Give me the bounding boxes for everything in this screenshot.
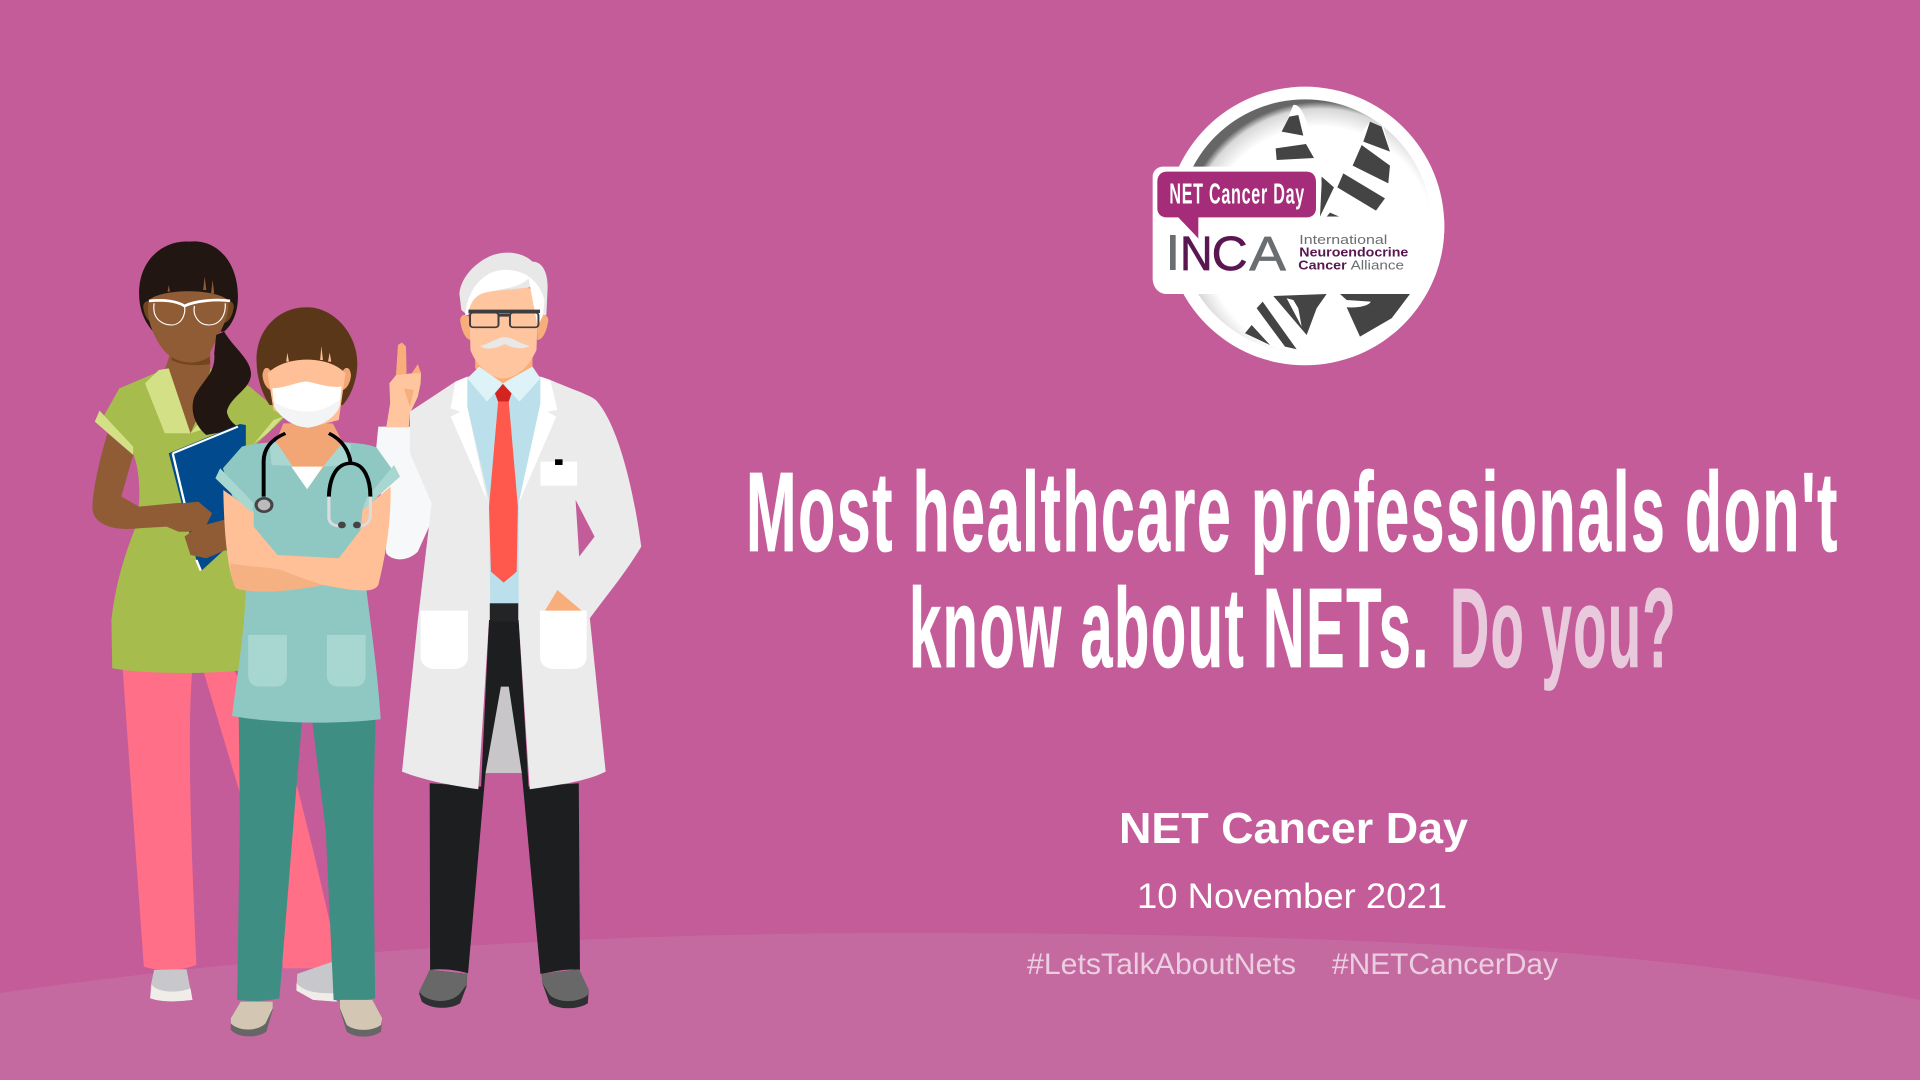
collar — [467, 367, 540, 402]
trousers — [122, 667, 333, 970]
INCA wordmark: N — [1180, 228, 1213, 281]
tunic — [223, 442, 391, 723]
shoes — [419, 969, 589, 1001]
figure: nurse — [215, 307, 400, 1037]
sleeve cuffs — [215, 465, 400, 513]
headline — [746, 449, 1839, 691]
alliance name: International — [1299, 233, 1387, 247]
logo white band — [1153, 167, 1444, 294]
face — [268, 360, 345, 428]
badge — [540, 462, 577, 486]
INCA wordmark: A — [1249, 228, 1286, 281]
moustache — [480, 337, 530, 349]
ears — [460, 315, 548, 340]
book — [169, 424, 246, 571]
coat — [402, 377, 641, 789]
shoes soles — [231, 1000, 382, 1037]
finger shading — [396, 343, 421, 407]
logo: NET Cancer Day / INCA — [1153, 87, 1444, 365]
sleeve — [376, 427, 440, 559]
face — [469, 284, 538, 378]
tunic pockets — [248, 635, 366, 687]
ears — [262, 368, 351, 390]
white hair — [465, 270, 544, 327]
shoe soles — [150, 983, 337, 1002]
shoes — [150, 962, 337, 1002]
zebra ribbon — [1245, 105, 1410, 349]
lapels — [451, 377, 557, 503]
tie — [489, 402, 518, 583]
crossed arms — [223, 487, 391, 592]
trousers — [430, 603, 580, 974]
hashtags: #NETCancerDay — [1332, 948, 1558, 981]
hands — [165, 502, 230, 558]
inner circle — [1178, 99, 1432, 353]
event name: NET Cancer Day — [1119, 804, 1469, 853]
arm shadow — [230, 563, 323, 592]
fringe slits — [168, 277, 214, 293]
belt — [490, 603, 518, 622]
mask highlight — [272, 382, 342, 412]
ground curve — [0, 933, 1920, 1080]
coat lining — [485, 687, 522, 773]
headline: Do you? — [1450, 565, 1677, 691]
illustration: healthcare professionals — [92, 241, 641, 1037]
figure: doctor — [376, 253, 641, 1008]
stethoscope — [256, 433, 370, 528]
raised hand — [386, 343, 421, 427]
doctor glasses — [468, 311, 540, 327]
arm — [92, 433, 212, 532]
mask — [272, 382, 342, 427]
hand in pocket — [544, 590, 583, 612]
alliance name — [1298, 233, 1408, 272]
INCA wordmark: C — [1212, 228, 1248, 281]
ears — [143, 301, 234, 323]
INCA wordmark — [1170, 228, 1286, 281]
neck shadow — [172, 355, 210, 365]
neck — [475, 353, 533, 387]
alliance name: Cancer — [1298, 258, 1347, 272]
fringe slits — [286, 346, 331, 362]
figure: woman in green — [92, 241, 337, 1002]
event date: 10 November 2021 — [1137, 877, 1447, 916]
grey hair — [459, 253, 548, 315]
glasses — [149, 300, 230, 325]
shirt — [467, 377, 540, 604]
hashtags — [1027, 948, 1558, 981]
logo disc — [1166, 87, 1444, 365]
hair back — [139, 241, 238, 333]
neck and chest — [163, 352, 210, 433]
hair — [257, 307, 357, 405]
book pages — [173, 427, 238, 571]
hashtags: #LetsTalkAboutNets — [1027, 948, 1296, 981]
dress — [102, 368, 285, 673]
undershirt — [291, 467, 323, 489]
neck — [275, 423, 343, 488]
alliance name: Alliance — [1351, 258, 1404, 272]
tie knot — [495, 384, 512, 402]
bubble text: NET Cancer Day — [1169, 178, 1305, 210]
pen — [555, 459, 563, 465]
trousers — [237, 713, 376, 1001]
collar and cuffs — [95, 368, 283, 455]
speech bubble — [1157, 172, 1316, 238]
headline: know about NETs. — [909, 565, 1430, 691]
yoke trim — [270, 443, 351, 467]
shoes — [231, 1000, 382, 1030]
shoes soles — [419, 969, 589, 1008]
face — [148, 291, 228, 362]
alliance name: Neuroendocrine — [1299, 246, 1408, 260]
ponytail — [193, 332, 251, 435]
coat pockets — [421, 611, 587, 669]
arm gap — [576, 500, 595, 557]
